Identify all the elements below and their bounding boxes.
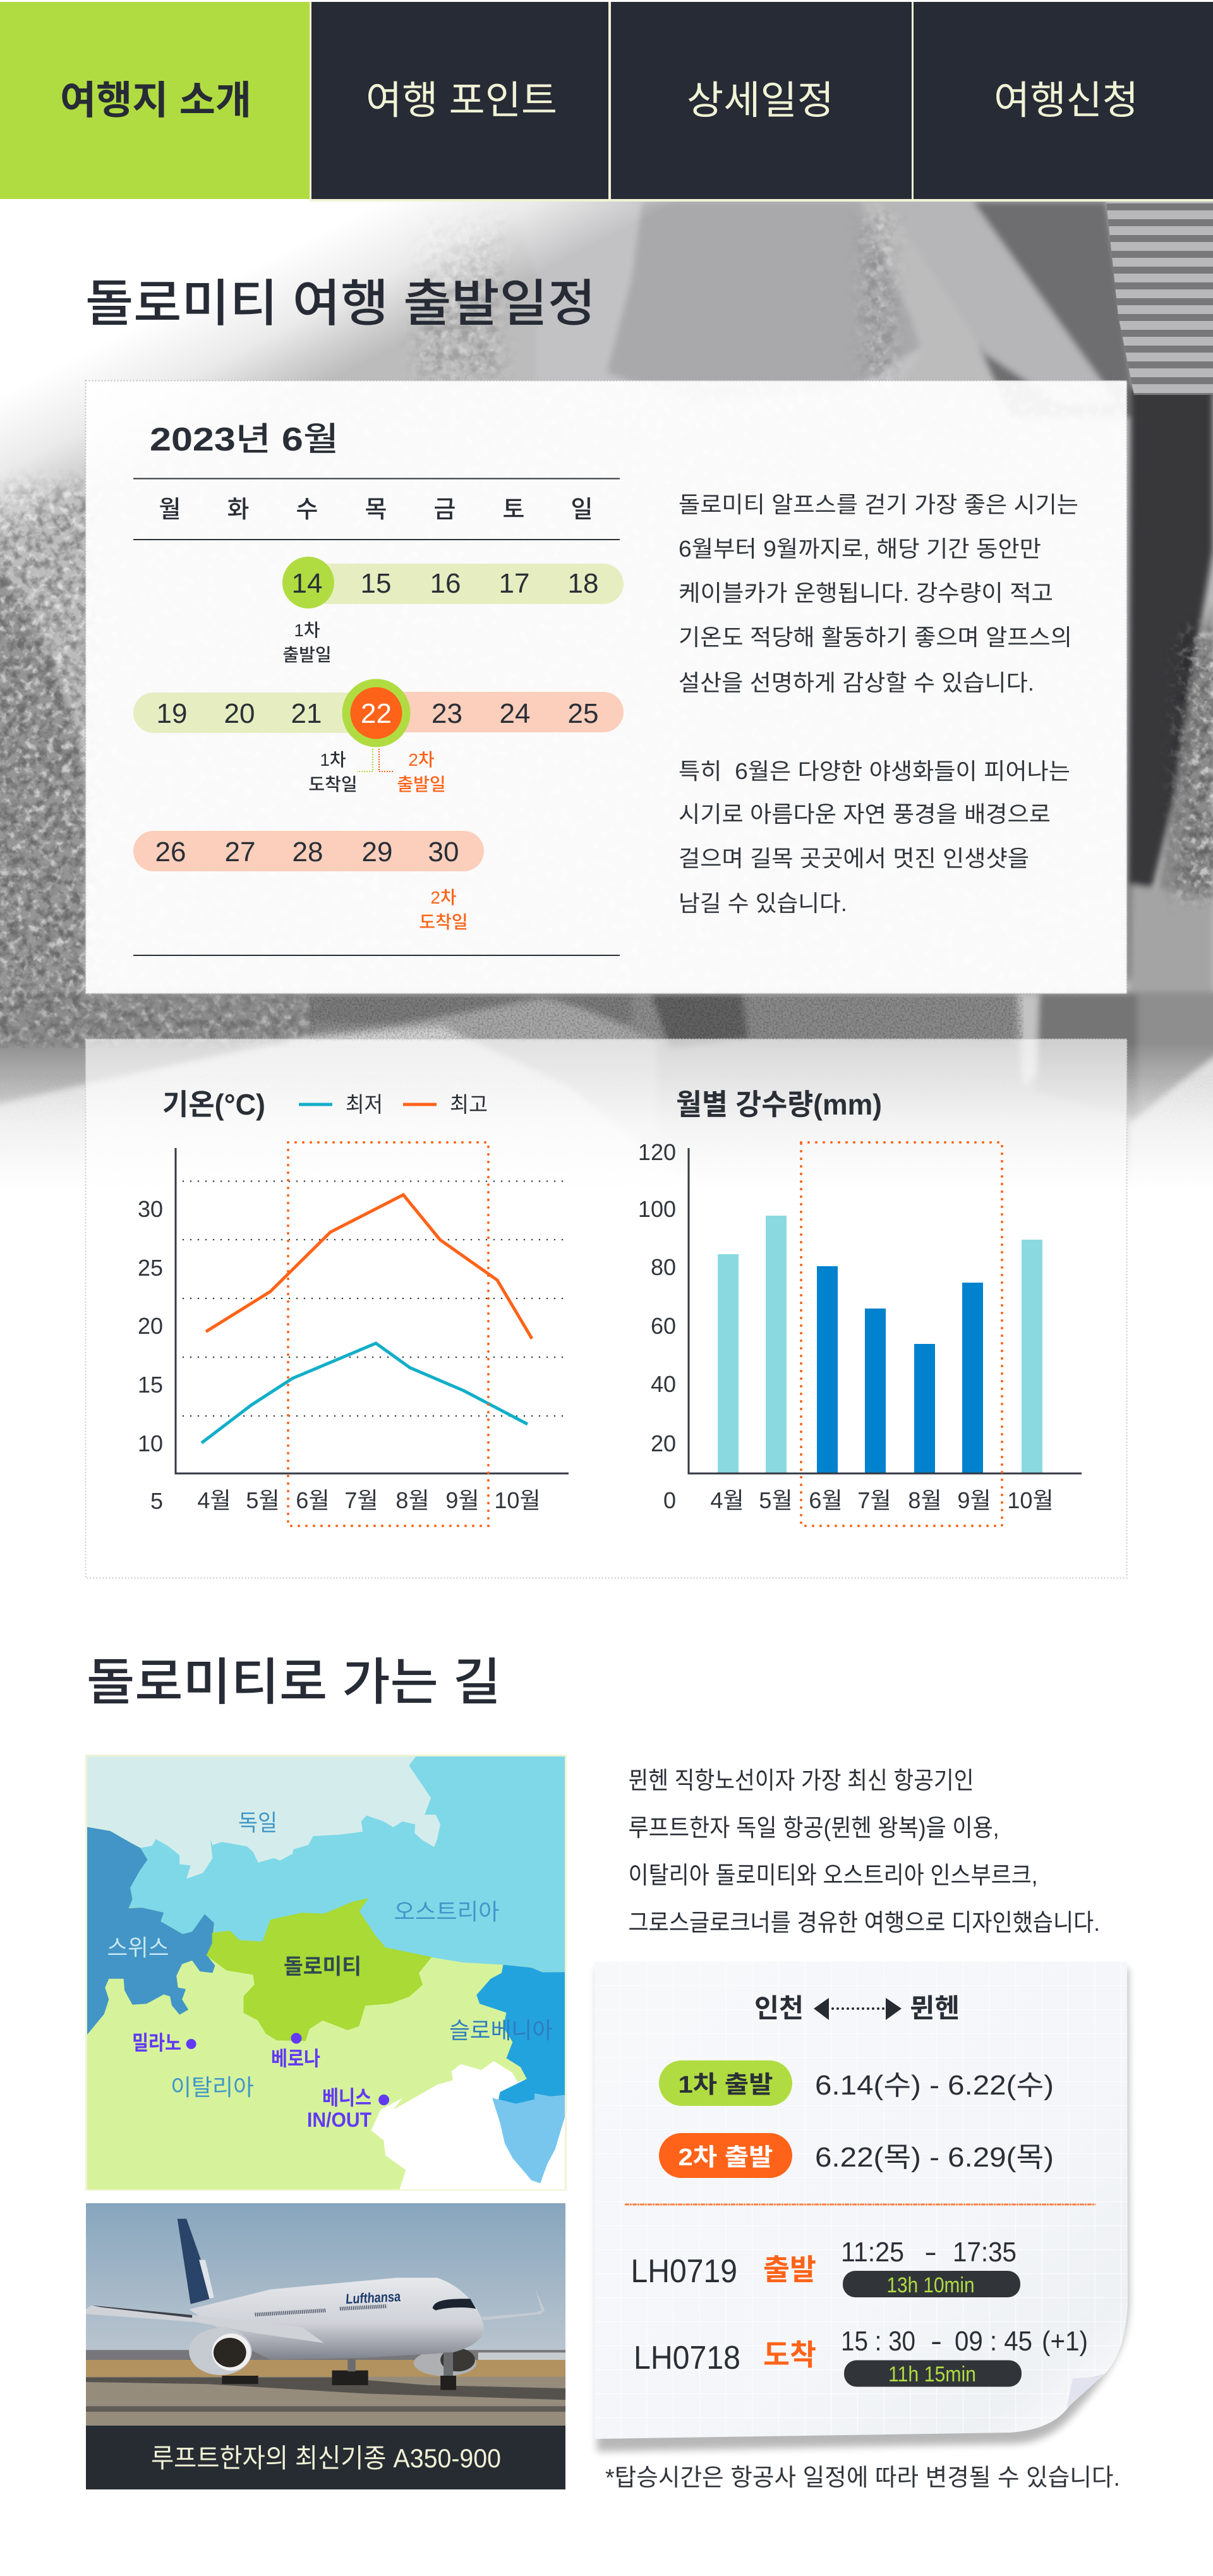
- label: first departure: [282, 620, 332, 665]
- temperature y labels: 15: [138, 1372, 163, 1398]
- temperature x labels: 7월: [344, 1487, 378, 1513]
- chart: monthly rainfall: [638, 1088, 1082, 1526]
- calendar week 3: 27: [225, 837, 255, 868]
- description text: 돌로미티 알프스를 걷기 가장 좋은 시기는: [679, 492, 1078, 517]
- rainfall y labels: 20: [651, 1430, 676, 1456]
- sea: [371, 2061, 565, 2189]
- label: second arrival: [419, 888, 468, 932]
- description text: 시기로 아름다운 자연 풍경을 배경으로: [679, 801, 1051, 827]
- calendar week 1: 14: [292, 568, 322, 599]
- calendar heading: 2023 년 6월: [150, 421, 339, 458]
- rainfall x labels: 6월: [809, 1487, 843, 1513]
- rainfall x labels: 5월: [759, 1487, 793, 1513]
- map labels: 독일: [238, 1810, 277, 1835]
- route heading: 뮌헨: [910, 1993, 960, 2023]
- flight outbound: [631, 2237, 1020, 2297]
- calendar week 2: 22: [361, 698, 392, 729]
- rainfall heading: 월별 강수량(mm): [676, 1088, 882, 1121]
- footnote: *탑승시간은 항공사 일정에 따라 변경될 수 있습니다.: [605, 2465, 1120, 2491]
- calendar week 3: [133, 831, 484, 871]
- Switzerland: [87, 1827, 215, 2035]
- flight inbound: -: [931, 2326, 942, 2357]
- highlight: June to September: [288, 1142, 488, 1526]
- label: first arrival: 도착일: [308, 775, 358, 794]
- label: second departure: 출발일: [397, 775, 446, 794]
- panel: climate charts: [86, 1039, 1127, 1578]
- rainfall x labels: 7월: [857, 1487, 891, 1513]
- rainfall y labels: 60: [651, 1313, 676, 1339]
- tab: active: 여행지 소개: [60, 79, 251, 123]
- description text: 특히 6월은 다양한 야생화들이 피어나는: [679, 758, 1070, 784]
- calendar week 3: 29: [362, 837, 392, 868]
- flight outbound: 17:35: [953, 2237, 1017, 2268]
- map labels: [107, 1810, 553, 2100]
- backpack hiker: [537, 206, 912, 380]
- flight outbound: -: [924, 2237, 937, 2268]
- rainfall x labels: 9월: [957, 1487, 991, 1513]
- calendar week 2: 25: [568, 698, 598, 729]
- map labels: 돌로미티: [284, 1955, 361, 1979]
- temperature y labels: 30: [138, 1196, 163, 1222]
- rainfall bars: [718, 1216, 1042, 1473]
- temperature x labels: 6월: [296, 1487, 330, 1513]
- wing far side: [481, 2289, 545, 2321]
- route description text: 루프트한자 독일 항공(뮌헨 왕복)을 이용,: [628, 1815, 999, 1842]
- striped shirt: [1106, 202, 1213, 395]
- temperature legend: 최고: [450, 1093, 488, 1117]
- flight inbound: LH0718: [634, 2340, 740, 2376]
- calendar weekday header: 화: [227, 497, 249, 523]
- flight inbound: 09 : 45: [955, 2326, 1032, 2357]
- label: first departure: 1차: [294, 620, 320, 640]
- calendar weekday header: 금: [434, 497, 456, 523]
- dark figure between hikers: [972, 202, 1135, 420]
- rainfall x labels: 4월: [710, 1487, 744, 1513]
- Croatia: [492, 2093, 565, 2183]
- left dark foliage: [0, 556, 85, 998]
- route description text: 그로스글로크너를 경유한 여행으로 디자인했습니다.: [628, 1910, 1100, 1937]
- title: departure schedule: 돌로미티 여행 출발일정: [85, 275, 596, 332]
- calendar week 2: 23: [431, 698, 462, 729]
- temperature x labels: 8월: [395, 1487, 430, 1513]
- temperature y labels: 20: [138, 1313, 163, 1339]
- rocks under the first panel: [0, 992, 1213, 1226]
- far engine: [414, 2350, 476, 2376]
- photo: Lufthansa A350-900: [86, 2203, 565, 2489]
- calendar week 2: 21: [291, 698, 322, 729]
- calendar week 1: 18: [568, 568, 598, 599]
- map marker: Venice: 베니스: [322, 2086, 371, 2109]
- tab: points: [311, 2, 608, 199]
- connector dotted lines: [357, 749, 394, 771]
- description text: 케이블카가 운행됩니다. 강수량이 적고: [679, 580, 1053, 606]
- calendar week 2: 24: [500, 698, 530, 729]
- jeans: [1127, 389, 1213, 986]
- flight outbound: 13h 10min: [887, 2273, 974, 2297]
- caption bar: 루프트한자의 최신기종 A350-900: [151, 2443, 501, 2473]
- rainfall y labels: 40: [651, 1371, 676, 1397]
- description text: 설산을 선명하게 감상할 수 있습니다.: [679, 670, 1034, 696]
- right foliage and rocks: [1156, 600, 1213, 897]
- flight outbound: 11:25: [841, 2237, 904, 2268]
- calendar week 1: 15: [361, 568, 391, 599]
- map labels: 오스트리아: [394, 1899, 499, 1925]
- map: Dolomites region: [85, 1755, 567, 2191]
- rainfall x labels: [710, 1487, 1054, 1513]
- temperature x labels: 9월: [445, 1487, 480, 1513]
- rainfall y labels: 0: [663, 1487, 676, 1513]
- description text: 기온도 적당해 활동하기 좋으며 알프스의: [679, 624, 1072, 650]
- calendar weekday header: 수: [296, 497, 318, 523]
- temperature heading: 기온(°C): [162, 1088, 265, 1121]
- route heading: [754, 1993, 960, 2023]
- line: maximum temperature: [206, 1195, 532, 1339]
- calendar week 1: [282, 557, 624, 608]
- navigation bar: [0, 0, 1213, 202]
- label: second departure: 2차: [408, 750, 435, 770]
- calendar weekday header: 목: [365, 497, 387, 523]
- title: route to the Dolomites: 돌로미티로 가는 길: [87, 1654, 501, 1710]
- label: first arrival: 1차: [320, 750, 346, 770]
- label: second departure: [397, 750, 446, 794]
- temperature x labels: 5월: [246, 1487, 280, 1513]
- temperature y labels: 10: [138, 1430, 163, 1456]
- Slovenia: [476, 1964, 565, 2104]
- map marker: Milan: 밀라노: [132, 2031, 181, 2054]
- near engine: [189, 2328, 252, 2375]
- calendar weekday header: 일: [571, 497, 593, 523]
- line: minimum temperature: [202, 1343, 528, 1443]
- tab: points: 여행 포인트: [366, 79, 557, 123]
- calendar weekday header: 월: [159, 497, 181, 523]
- first departure dates: 6.14(수) - 6.22(수): [815, 2070, 1054, 2101]
- tab: apply: 여행신청: [994, 79, 1138, 123]
- temperature legend: [299, 1093, 488, 1117]
- rainfall y labels: 100: [638, 1196, 676, 1222]
- label: second arrival: 도착일: [419, 912, 468, 932]
- note card: flight schedule: [594, 1962, 1129, 2452]
- chart: temperature: [138, 1088, 569, 1526]
- label: second arrival: 2차: [430, 888, 457, 907]
- airline name: Lufthansa: [345, 2289, 401, 2307]
- calendar week 2: 20: [224, 698, 255, 729]
- highlight: June to September: [801, 1142, 1002, 1526]
- tab: itinerary: [611, 2, 912, 199]
- label: first arrival: [308, 750, 358, 794]
- temperature x labels: 4월: [197, 1487, 231, 1513]
- route description text: 뮌헨 직항노선이자 가장 최신 항공기인: [628, 1768, 974, 1794]
- sand hill: [0, 1027, 695, 1188]
- foliage texture: [0, 202, 1213, 1048]
- Dolomites: [207, 1899, 431, 2041]
- rainfall y labels: 120: [638, 1139, 676, 1165]
- temperature x labels: [197, 1487, 541, 1513]
- second departure badge: 2차 출발: [679, 2144, 773, 2171]
- map labels: 슬로베니아: [449, 2017, 553, 2043]
- description text: [679, 492, 1078, 916]
- map marker: Venice: [307, 2086, 389, 2131]
- first departure badge: 1차 출발: [679, 2072, 773, 2098]
- calendar weekday header: [133, 479, 620, 955]
- second departure dates: 6.22(목) - 6.29(목): [815, 2142, 1054, 2173]
- flight inbound: 11h 15min: [888, 2362, 976, 2386]
- calendar week 1: 16: [430, 568, 461, 599]
- description text: 6월부터 9월까지로, 해당 기간 동안만: [679, 536, 1041, 562]
- description text: 남길 수 있습니다.: [679, 890, 847, 916]
- rainfall y labels: [638, 1139, 676, 1513]
- route description text: [628, 1768, 1100, 1937]
- map marker: Verona: 베로나: [271, 2047, 320, 2070]
- label: first departure: 출발일: [282, 645, 332, 665]
- calendar week 2: [133, 679, 624, 747]
- calendar weekday header: 토: [503, 497, 524, 523]
- temperature legend: 최저: [346, 1093, 383, 1117]
- calendar week 3: 30: [428, 837, 459, 868]
- calendar week 3: 26: [155, 837, 186, 868]
- tab: active: [0, 2, 310, 199]
- near wing: [86, 2305, 324, 2343]
- caption bar: [86, 2426, 565, 2489]
- rainfall x labels: 8월: [908, 1487, 942, 1513]
- calendar week 1: 17: [499, 568, 529, 599]
- temperature y labels: [138, 1196, 163, 1514]
- flight inbound: 15 : 30: [841, 2326, 915, 2357]
- route description text: 이탈리아 돌로미티와 오스트리아 인스부르크,: [628, 1863, 1037, 1889]
- calendar week 3: 28: [293, 837, 323, 868]
- first departure badge: [659, 2060, 792, 2106]
- tab: itinerary: 상세일정: [687, 79, 834, 123]
- route heading: 인천: [754, 1993, 804, 2023]
- calendar week 2: 19: [157, 698, 187, 729]
- fuselage: [189, 2278, 484, 2360]
- rainfall y labels: 80: [651, 1254, 676, 1280]
- map labels: 스위스: [107, 1935, 169, 1961]
- fades to white: [0, 202, 821, 707]
- flight inbound: 도착: [763, 2338, 816, 2371]
- flight inbound: [634, 2326, 1088, 2387]
- cockpit: [433, 2299, 476, 2311]
- Germany: [87, 1757, 440, 1878]
- landing gear: [222, 2371, 456, 2390]
- map marker: Venice: IN/OUT: [307, 2108, 371, 2131]
- windows: [255, 2306, 387, 2314]
- map marker: Verona: [271, 2033, 320, 2070]
- temperature x labels: 10월: [494, 1487, 541, 1513]
- rainfall x labels: 10월: [1007, 1487, 1054, 1513]
- second departure badge: [659, 2133, 792, 2178]
- flight outbound: 출발: [763, 2253, 816, 2286]
- description text: 걸으며 길목 곳곳에서 멋진 인생샷을: [679, 845, 1029, 871]
- tab: apply: [914, 2, 1213, 199]
- temperature y labels: 25: [138, 1255, 163, 1281]
- map labels: 이탈리아: [171, 2074, 254, 2100]
- temperature y labels: 5: [150, 1488, 163, 1514]
- flight outbound: LH0719: [631, 2253, 737, 2290]
- shoulder strap: [915, 202, 1106, 380]
- flight inbound: (+1): [1042, 2326, 1088, 2357]
- background photo: hikers in greyscale: [0, 202, 1213, 1226]
- Austria: [129, 1757, 565, 1973]
- panel: calendar and description: [86, 380, 1127, 993]
- tail fin: [178, 2219, 214, 2304]
